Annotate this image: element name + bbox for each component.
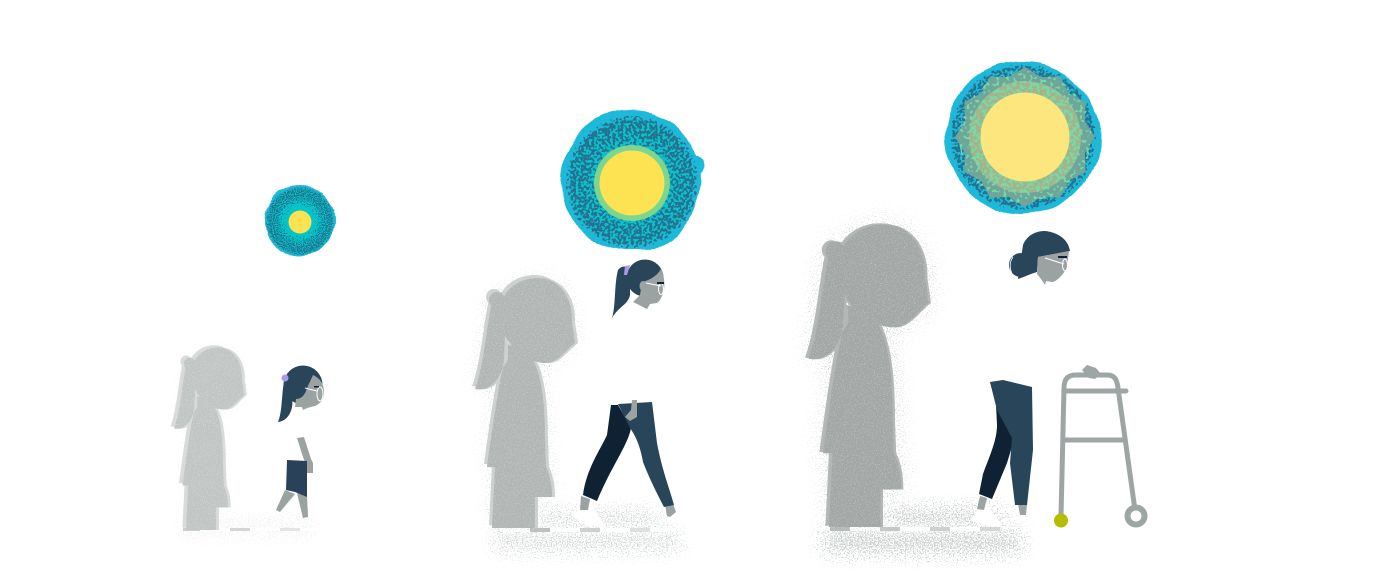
sun, large: [946, 60, 1100, 214]
rear leg: [583, 405, 631, 501]
sun, medium: [560, 110, 705, 252]
arm: [297, 437, 313, 473]
eye: [314, 386, 319, 388]
hair and ponytail: [278, 366, 322, 422]
walker middle bar: [1065, 438, 1124, 442]
ear: [640, 281, 646, 291]
ground speckle and dashes, scene one: [170, 515, 320, 539]
front leg: [618, 402, 674, 507]
sun, small: [264, 186, 336, 256]
walker top bar: [1066, 388, 1126, 394]
scrunchie: [282, 374, 288, 382]
face: [1037, 251, 1069, 285]
face: [295, 375, 324, 410]
walker wheel: [1128, 508, 1144, 524]
ankles: [977, 496, 1027, 515]
white shoe on speckle: [572, 506, 603, 527]
glasses: [1045, 258, 1068, 271]
face: [633, 269, 664, 309]
scrunchie: [624, 265, 630, 275]
panel: scene one, child: [170, 186, 336, 539]
rear leg: [979, 405, 1014, 499]
eye: [1058, 256, 1067, 258]
shorts: [286, 460, 307, 497]
glasses: [646, 283, 664, 294]
walker: [1061, 375, 1135, 516]
legs: [276, 490, 308, 518]
eye: [657, 282, 664, 284]
walker frame: [1061, 375, 1135, 516]
hand: [625, 400, 637, 421]
panel: scene two, adult walking: [472, 110, 705, 550]
white shoe on speckle: [970, 506, 1000, 527]
shadow silhouette, scene three: [805, 223, 931, 527]
bun outline: [1010, 257, 1018, 279]
hand on walker: [1082, 365, 1101, 379]
adult figure: [572, 260, 676, 527]
child figure: [276, 366, 324, 518]
hair: [1018, 231, 1070, 279]
front leg: [990, 380, 1033, 505]
ground speckle and dashes, scene three: [822, 508, 1022, 553]
walker rubber tip: [1054, 514, 1068, 528]
shadow silhouette, scene one: [171, 345, 247, 530]
bun: [1009, 253, 1033, 277]
ground speckle and dashes, scene two: [495, 512, 680, 550]
older adult figure: [970, 231, 1144, 528]
panel: scene three, older adult with walker: [805, 60, 1144, 553]
glasses: [305, 387, 323, 401]
hair and ponytail: [612, 260, 664, 318]
ankles: [580, 496, 676, 517]
shadow silhouette, scene two: [472, 275, 578, 528]
